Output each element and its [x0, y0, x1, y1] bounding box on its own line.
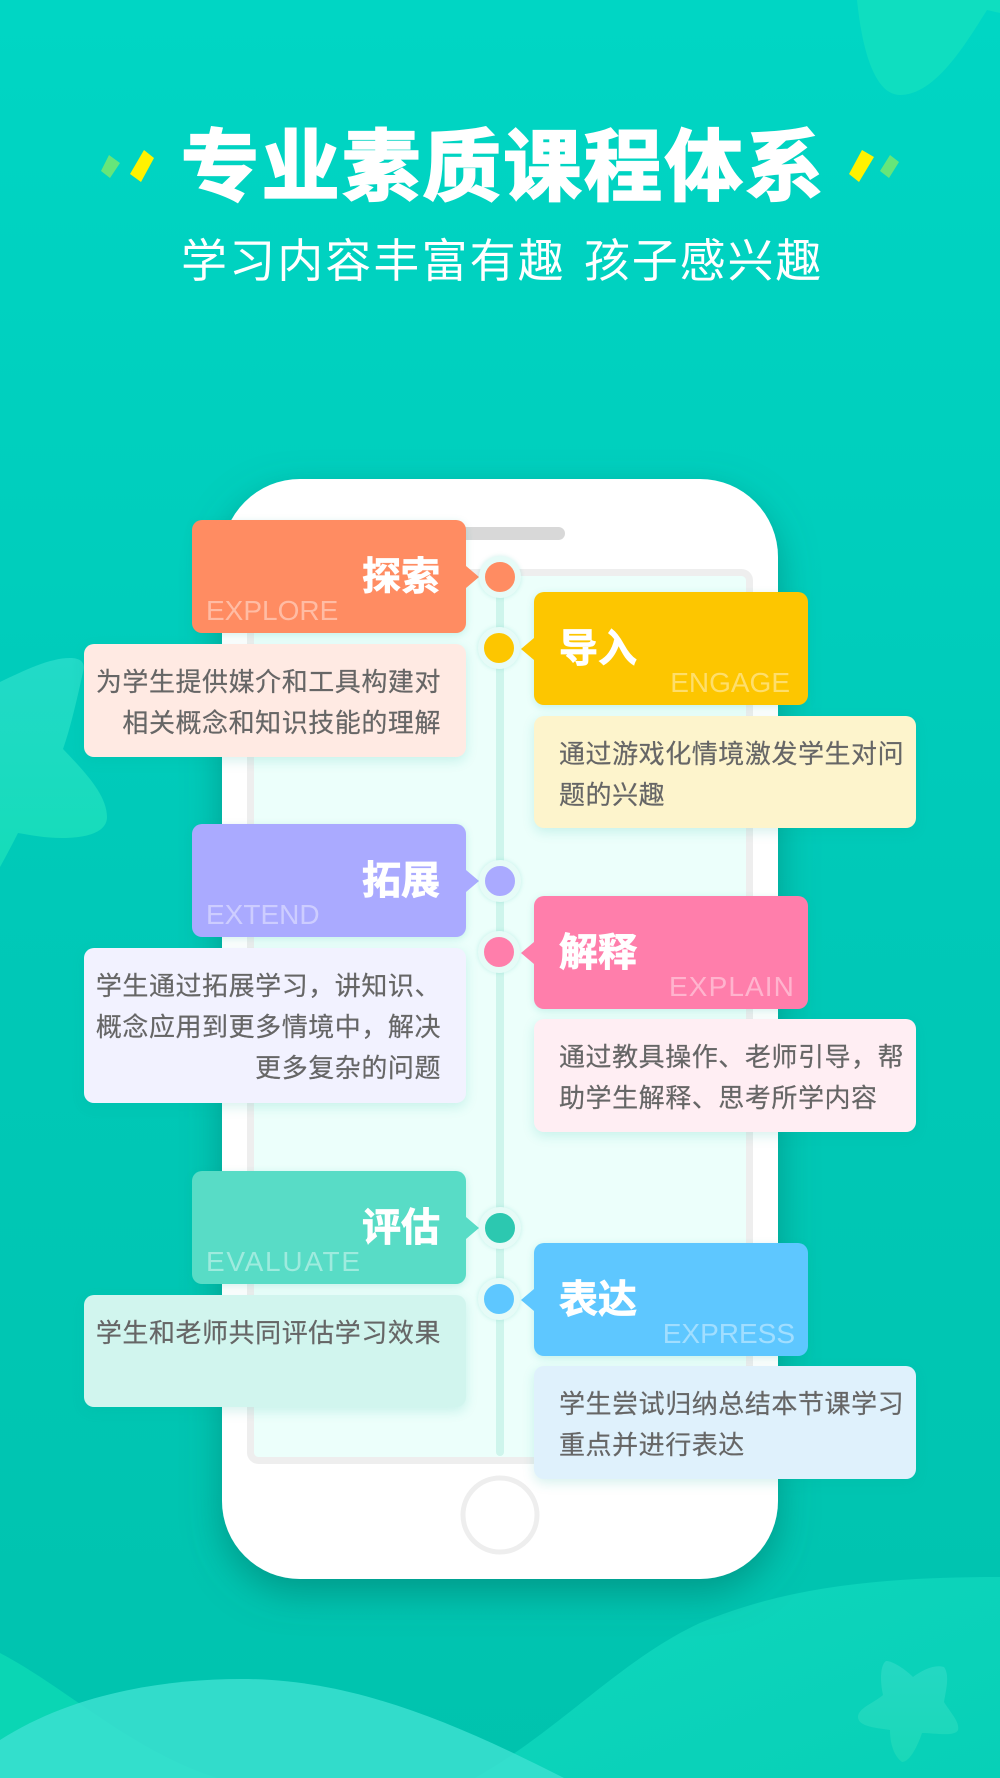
explain description: 助学生解释、思考所学内容	[559, 1083, 878, 1113]
explain description	[534, 1019, 916, 1132]
panel: extend	[84, 822, 479, 1112]
explain header	[534, 896, 808, 1009]
dot: evaluate	[479, 1207, 521, 1249]
title: 专业素质课程体系	[181, 123, 826, 211]
dot: engage	[478, 627, 520, 669]
panel: engage	[521, 590, 916, 836]
engage header: ENGAGE	[670, 667, 790, 698]
dot: explore	[479, 556, 521, 598]
extend description: 更多复杂的问题	[255, 1053, 441, 1083]
extend header: EXTEND	[206, 899, 320, 930]
dot: express	[478, 1278, 520, 1320]
extend description: 学生通过拓展学习，讲知识、	[96, 971, 441, 1001]
extend header: 拓展	[362, 860, 440, 903]
engage header: 导入	[559, 628, 637, 671]
evaluate header	[192, 1171, 466, 1284]
evaluate header: 评估	[362, 1207, 440, 1250]
dot: explain	[478, 931, 520, 973]
engage description: 题的兴趣	[559, 780, 665, 810]
explain header: 解释	[559, 932, 637, 975]
extend description: 概念应用到更多情境中，解决	[96, 1012, 441, 1042]
evaluate description: 学生和老师共同评估学习效果	[96, 1318, 441, 1348]
panel: explore	[84, 518, 479, 766]
explain description: 通过教具操作、老师引导，帮	[559, 1042, 904, 1072]
panel: evaluate	[84, 1170, 479, 1416]
express header	[534, 1243, 808, 1356]
icon: right accent ticks	[849, 150, 899, 182]
dot: extend	[479, 860, 521, 902]
engage header	[534, 592, 808, 705]
extend header	[192, 824, 466, 937]
panel: express	[521, 1242, 916, 1488]
explain header: EXPLAIN	[669, 971, 795, 1002]
evaluate header: EVALUATE	[206, 1246, 362, 1277]
icon: left accent ticks	[101, 150, 154, 182]
express description	[534, 1366, 916, 1479]
express description: 重点并进行表达	[559, 1430, 745, 1460]
extend description	[84, 948, 466, 1103]
evaluate description	[84, 1295, 466, 1407]
engage description	[534, 716, 916, 828]
explore description: 相关概念和知识技能的理解	[122, 708, 441, 738]
phone	[205, 476, 795, 1608]
express header: EXPRESS	[663, 1318, 795, 1349]
panel: explain	[521, 894, 916, 1140]
explore header	[192, 520, 466, 633]
explore description	[84, 644, 466, 757]
explore description: 为学生提供媒介和工具构建对	[96, 667, 441, 697]
explore header: 探索	[362, 556, 440, 599]
engage description: 通过游戏化情境激发学生对问	[559, 739, 904, 769]
express header: 表达	[559, 1279, 637, 1322]
subtitle: 学习内容丰富有趣 孩子感兴趣	[181, 235, 823, 287]
explore header: EXPLORE	[206, 595, 338, 626]
express description: 学生尝试归纳总结本节课学习	[559, 1389, 904, 1419]
